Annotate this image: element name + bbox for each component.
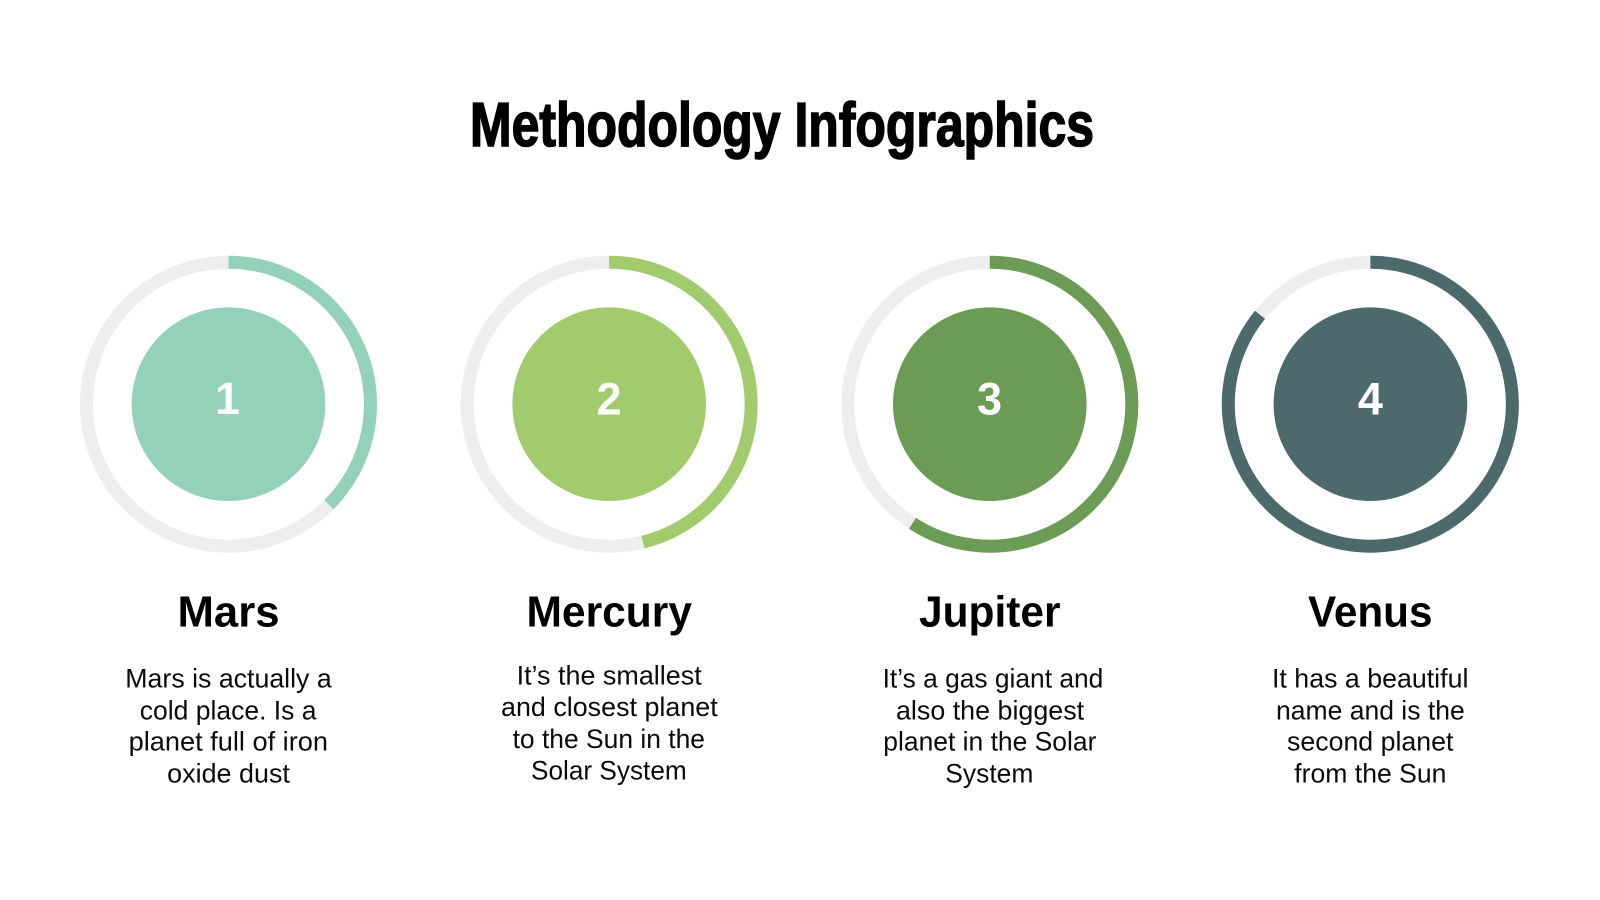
text block: Mars description: oxide dust	[167, 758, 291, 788]
text block: Jupiter description	[883, 664, 1103, 788]
number badge: 2	[512, 307, 706, 501]
text block: Venus description	[1272, 664, 1468, 788]
panel: Venus	[1228, 262, 1512, 788]
number badge: 3	[893, 307, 1087, 501]
text block: Venus description: second planet	[1287, 727, 1454, 757]
number badge: 2: 2	[596, 374, 622, 424]
progress ring: Jupiter	[848, 262, 1132, 546]
text block: Mars description: planet full of iron	[129, 727, 328, 757]
panel: Jupiter	[848, 262, 1132, 788]
number badge: 1	[132, 307, 325, 501]
text block: Venus description: name and is the	[1276, 695, 1465, 725]
text block: Mars description: cold place. Is a	[140, 695, 317, 725]
progress ring: Mars	[86, 262, 370, 546]
text block: Mercury description	[501, 660, 718, 786]
heading: Jupiter: Jupiter	[919, 588, 1060, 637]
text block: Mercury description: and closest planet	[501, 692, 718, 722]
text block: Mercury description: Solar System	[531, 756, 687, 786]
number badge: 4: 4	[1358, 374, 1383, 424]
number badge: 1: 1	[215, 373, 240, 424]
progress ring: Mercury	[467, 262, 751, 546]
title: Methodology Infographics	[470, 91, 1094, 160]
text block: Mars description: Mars is actually a	[125, 664, 332, 694]
text block: Mars description	[125, 664, 332, 788]
panel: Mars	[86, 262, 370, 788]
text block: Mercury description: It’s the smallest	[517, 660, 702, 690]
heading: Venus: Venus	[1308, 588, 1432, 637]
heading: Mars: Mars	[178, 588, 280, 637]
text block: Jupiter description: System	[945, 758, 1033, 788]
number badge: 3: 3	[977, 374, 1002, 424]
text block: Jupiter description: planet in the Solar	[883, 727, 1097, 757]
heading: Mercury: Mercury	[526, 588, 693, 637]
number badge: 4	[1274, 307, 1467, 501]
text block: Jupiter description: It’s a gas giant and	[883, 664, 1103, 694]
progress ring: Venus	[1228, 262, 1512, 546]
text block: Jupiter description: also the biggest	[896, 695, 1085, 725]
text block: Venus description: from the Sun	[1294, 758, 1446, 788]
panel: Mercury	[467, 262, 751, 786]
text block: Venus description: It has a beautiful	[1272, 664, 1468, 694]
text block: Mercury description: to the Sun in the	[513, 724, 705, 754]
